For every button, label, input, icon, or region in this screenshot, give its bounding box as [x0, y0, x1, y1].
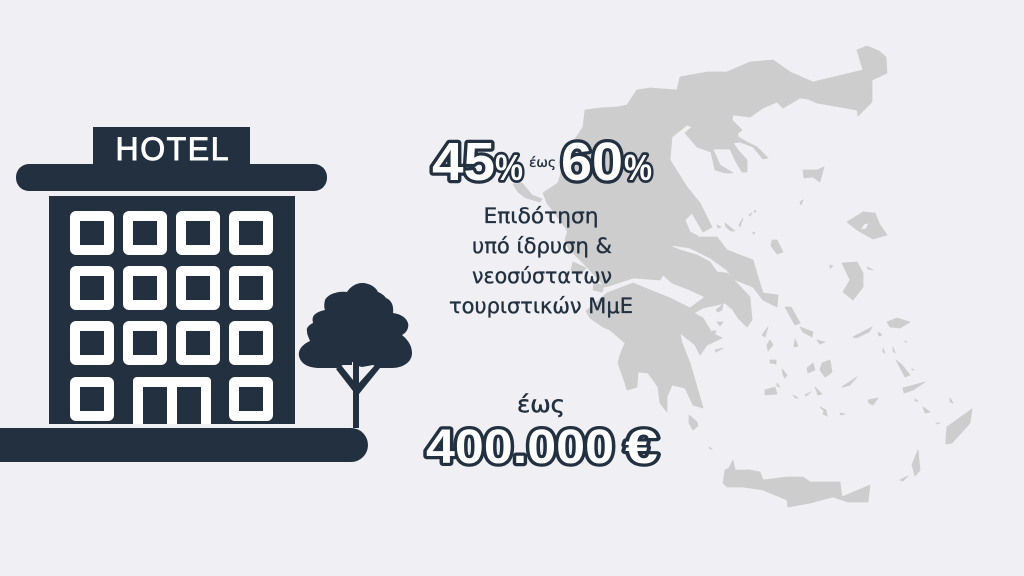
roof — [16, 164, 327, 191]
Corfu and Ionian islands — [513, 183, 542, 202]
stat: up to 400,000 euros: 400.000 — [426, 421, 614, 474]
Aegean islands — [689, 200, 953, 481]
hotel illustration — [0, 127, 412, 462]
description text — [449, 204, 633, 318]
hotel sign — [93, 127, 250, 167]
description text: νεοσύστατων — [472, 264, 612, 288]
description text: τουριστικών ΜμΕ — [449, 294, 633, 318]
door — [133, 377, 211, 424]
Crete — [723, 460, 870, 507]
Euboea — [670, 237, 778, 307]
stat: up to 400,000 euros: € — [625, 421, 658, 474]
Lemnos — [803, 167, 824, 182]
hotel sign: HOTEL — [116, 131, 228, 167]
building with windows — [49, 196, 295, 424]
mainland and Peloponnese — [543, 46, 887, 412]
stat: 45% to 60%: έως — [529, 156, 556, 171]
stat: 45% to 60%: % — [624, 147, 652, 188]
Rhodes — [946, 409, 972, 444]
description text: υπό ίδρυση & — [472, 234, 612, 258]
description text: Επιδότηση — [484, 204, 598, 228]
stat: up to 400,000 euros: έως — [517, 392, 565, 418]
stat: up to 400,000 euros — [426, 392, 658, 474]
stat: 45% to 60%: % — [495, 147, 523, 188]
Lesvos — [847, 212, 887, 239]
stat: 45% to 60%: 60 — [561, 132, 623, 192]
tree — [299, 283, 412, 428]
stat: 45% to 60% — [432, 132, 652, 192]
ground — [0, 428, 368, 462]
map of Greece — [513, 46, 972, 507]
stat: 45% to 60%: 45 — [432, 132, 495, 192]
Chios — [842, 262, 863, 300]
